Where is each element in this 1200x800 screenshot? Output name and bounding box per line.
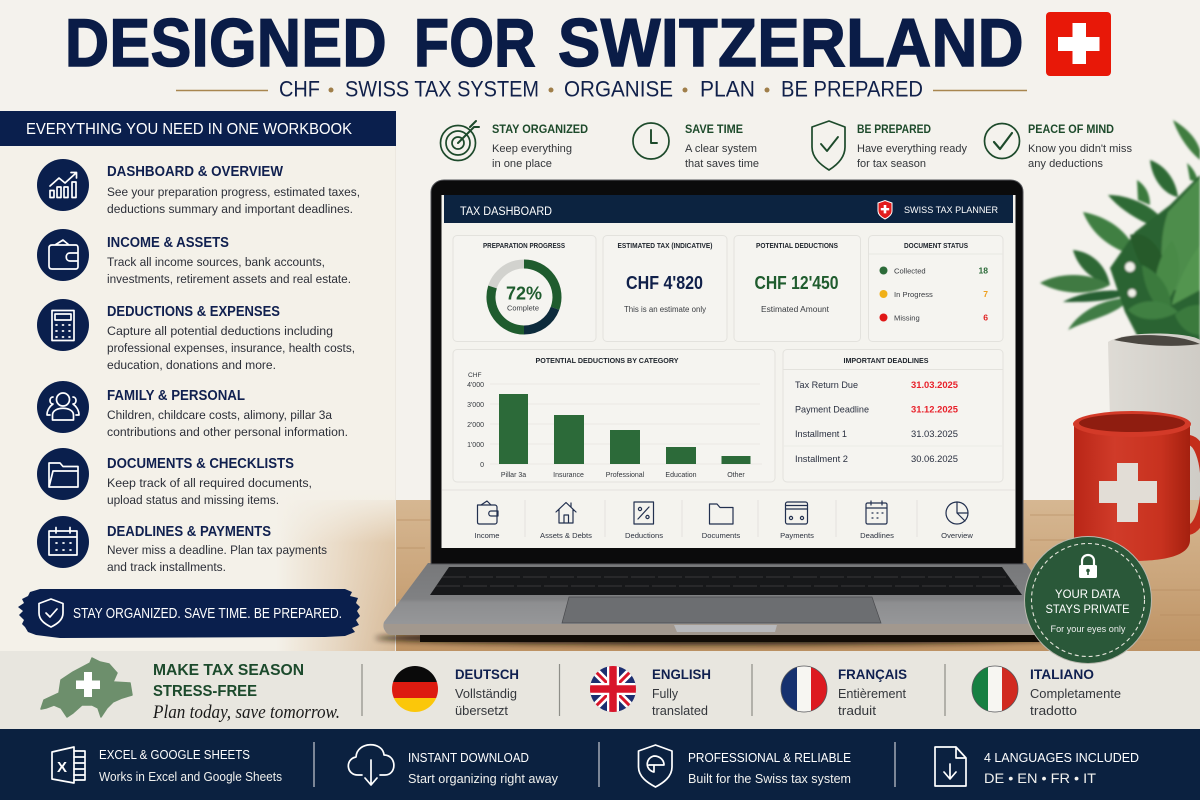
- dashboard navigation: Overview: [941, 531, 973, 540]
- footer features: [0, 729, 1200, 800]
- card: estimated tax: This is an estimate only: [624, 305, 706, 314]
- feature: professional and reliable: [638, 745, 851, 787]
- subtitle row: [176, 76, 1027, 102]
- card: important deadlines: Payment Deadline: [795, 404, 869, 414]
- language: English: ENGLISH: [652, 666, 711, 682]
- card: document status: Missing: [894, 314, 920, 322]
- dashboard navigation: Payments: [780, 531, 814, 540]
- feature: professional and reliable: Built for the Swiss tax system: [688, 771, 851, 786]
- language: Italian: ITALIANO: [1030, 666, 1094, 682]
- benefit: save time: that saves time: [685, 158, 759, 170]
- banner: stay organized: STAY ORGANIZED. SAVE TIME. BE PREPARED.: [73, 606, 342, 622]
- feature: four languages: [935, 747, 1139, 786]
- subtitle row: CHF: [279, 76, 320, 102]
- left panel background: [0, 146, 396, 651]
- benefit: stay organized: in one place: [492, 158, 552, 170]
- item: dashboard and overview: deductions summary and important deadlines.: [107, 202, 353, 216]
- bar chart: potential deductions by category: Education: [665, 472, 697, 479]
- subtitle row: PLAN: [700, 76, 755, 102]
- card: document status: [868, 236, 1003, 342]
- benefit: stay organized: [440, 121, 588, 170]
- card: estimated tax: CHF 4'820: [626, 273, 703, 293]
- language: Italian: Completamente: [1030, 686, 1121, 701]
- bar chart: potential deductions by category: Pillar 3a: [501, 472, 526, 479]
- benefit: save time: [633, 123, 759, 170]
- bar chart: potential deductions by category: 2'000: [467, 422, 484, 429]
- card: important deadlines: 31.03.2025: [911, 429, 958, 439]
- card: estimated tax: ESTIMATED TAX (INDICATIVE): [618, 241, 713, 250]
- card: potential deductions: CHF 12'450: [754, 273, 838, 293]
- item: documents and checklists: upload status and missing items.: [107, 493, 279, 507]
- privacy badge: STAYS PRIVATE: [1046, 602, 1130, 616]
- benefit: stay organized: STAY ORGANIZED: [492, 124, 588, 136]
- item: income and assets: INCOME & ASSETS: [107, 235, 229, 251]
- screen: [442, 195, 1016, 548]
- card: important deadlines: Installment 2: [795, 454, 848, 464]
- language: French: traduit: [838, 703, 876, 718]
- item: family and personal: FAMILY & PERSONAL: [107, 388, 245, 404]
- card: important deadlines: [783, 350, 1003, 482]
- card: potential deductions: Estimated Amount: [761, 305, 830, 314]
- panel heading: EVERYTHING YOU NEED IN ONE WORKBOOK: [26, 121, 353, 138]
- card: important deadlines: Tax Return Due: [795, 380, 858, 390]
- feature: four languages: 4 LANGUAGES INCLUDED: [984, 751, 1139, 765]
- item: family and personal: contributions and other personal information.: [107, 425, 348, 439]
- item: dashboard and overview: See your preparation progress, estimated taxes,: [107, 185, 360, 199]
- feature: Excel and Google Sheets: EXCEL & GOOGLE SHEETS: [99, 748, 250, 762]
- bar chart: potential deductions by category: 4'000: [467, 382, 484, 389]
- card: document status: In Progress: [894, 290, 933, 299]
- feature: instant download: Start organizing right away: [408, 771, 559, 786]
- card: document status: DOCUMENT STATUS: [904, 241, 968, 250]
- card: important deadlines: 30.06.2025: [911, 454, 958, 464]
- bar chart: potential deductions by category: POTENTIAL DEDUCTIONS BY CATEGORY: [536, 356, 679, 365]
- card: preparation progress: Complete: [507, 304, 539, 312]
- icon: Switzerland map: [41, 658, 132, 717]
- benefit: be prepared: BE PREPARED: [857, 124, 931, 136]
- item: deductions and expenses: Capture all potential deductions including: [107, 324, 333, 338]
- item: deductions and expenses: [37, 299, 355, 372]
- feature: instant download: [348, 745, 559, 786]
- benefit: peace of mind: Know you didn't miss: [1028, 143, 1133, 155]
- card: document status: Collected: [894, 266, 926, 276]
- language: French: FRANÇAIS: [838, 666, 907, 682]
- item: family and personal: [37, 381, 348, 439]
- bar chart: potential deductions by category: 3'000: [467, 402, 484, 409]
- title: [65, 5, 1024, 81]
- language: German: [392, 666, 519, 718]
- subtitle row: SWISS TAX SYSTEM: [345, 76, 539, 102]
- card: preparation progress: [453, 236, 596, 342]
- plant pot: [1108, 334, 1200, 500]
- privacy badge: For your eyes only: [1050, 624, 1126, 635]
- item: deadlines and payments: and track installments.: [107, 560, 226, 574]
- item: documents and checklists: DOCUMENTS & CHECKLISTS: [107, 456, 294, 472]
- laptop lid: [431, 180, 1023, 564]
- feature: Excel and Google Sheets: Works in Excel and Google Sheets: [99, 769, 282, 784]
- dashboard header: SWISS TAX PLANNER: [904, 205, 998, 216]
- language: French: [781, 666, 907, 718]
- slogan: Plan today, save tomorrow.: [152, 703, 340, 723]
- item: deadlines and payments: Never miss a deadline. Plan tax payments: [107, 543, 327, 557]
- dashboard navigation: Deadlines: [860, 531, 894, 540]
- privacy badge: [1024, 536, 1152, 664]
- card: document status: 7: [983, 289, 988, 299]
- title: DESIGNED: [65, 5, 387, 81]
- card: important deadlines: Installment 1: [795, 429, 847, 439]
- bar chart: potential deductions by category: 1'000: [467, 442, 484, 449]
- dashboard navigation: Documents: [702, 531, 740, 540]
- dashboard navigation: [442, 490, 1015, 540]
- red mug with Swiss cross: [1073, 411, 1200, 561]
- feature: four languages: DE • EN • FR • IT: [984, 770, 1096, 786]
- language: English: Fully: [652, 686, 679, 701]
- item: income and assets: [37, 229, 351, 286]
- item: income and assets: investments, retirement assets and real estate.: [107, 272, 351, 286]
- language: French: Entièrement: [838, 686, 906, 701]
- left panel: everything you need: [0, 111, 396, 651]
- dashboard navigation: Deductions: [625, 531, 663, 540]
- icon: Swiss flag: [1046, 12, 1111, 76]
- card: important deadlines: 31.12.2025: [911, 404, 958, 414]
- item: deadlines and payments: [37, 516, 327, 574]
- item: dashboard and overview: DASHBOARD & OVERVIEW: [107, 164, 283, 180]
- subtitle row: ORGANISE: [564, 76, 673, 102]
- card: document status: 6: [983, 312, 988, 322]
- card: preparation progress: 72%: [506, 284, 542, 304]
- benefit: peace of mind: [984, 124, 1133, 170]
- card: estimated tax: [603, 236, 727, 342]
- feature: Excel and Google Sheets: [52, 747, 282, 784]
- card: potential deductions: POTENTIAL DEDUCTIONS: [756, 241, 838, 250]
- language: English: [590, 666, 711, 718]
- feature: instant download: INSTANT DOWNLOAD: [408, 751, 529, 765]
- bar chart: potential deductions by category: Other: [727, 472, 745, 479]
- feature: professional and reliable: PROFESSIONAL & RELIABLE: [688, 751, 851, 765]
- bar chart: potential deductions by category: Insurance: [553, 472, 584, 479]
- slogan: MAKE TAX SEASON: [153, 662, 304, 679]
- title: FOR: [414, 5, 536, 81]
- slogan: STRESS-FREE: [153, 683, 257, 700]
- item: deadlines and payments: DEADLINES & PAYMENTS: [107, 524, 271, 540]
- card: preparation progress: PREPARATION PROGRESS: [483, 241, 565, 250]
- dashboard header: TAX DASHBOARD: [460, 206, 552, 218]
- slogan: [152, 662, 340, 723]
- card: potential deductions: [734, 236, 860, 342]
- bar chart: potential deductions by category: Professional: [606, 472, 645, 479]
- item: deductions and expenses: professional expenses, insurance, health costs,: [107, 341, 355, 355]
- benefit: be prepared: Have everything ready: [857, 143, 967, 155]
- card: important deadlines: IMPORTANT DEADLINES: [844, 356, 929, 365]
- item: family and personal: Children, childcare costs, alimony, pillar 3a: [107, 408, 332, 422]
- item: documents and checklists: Keep track of all required documents,: [107, 476, 312, 490]
- donut chart 72%: [491, 264, 557, 330]
- subtitle row: BE PREPARED: [781, 76, 923, 102]
- benefit: stay organized: Keep everything: [492, 143, 572, 155]
- item: deductions and expenses: DEDUCTIONS & EXPENSES: [107, 304, 280, 320]
- title: SWITZERLAND: [558, 5, 1024, 81]
- benefit: peace of mind: PEACE OF MIND: [1028, 124, 1114, 136]
- banner: stay organized: [18, 589, 360, 638]
- language: German: Vollständig: [455, 686, 517, 701]
- item: documents and checklists: [37, 448, 312, 507]
- privacy badge: YOUR DATA: [1055, 587, 1120, 601]
- plant: [1040, 120, 1200, 345]
- language: German: DEUTSCH: [455, 666, 519, 682]
- laptop base: [383, 563, 1060, 635]
- icon: map cross: [76, 672, 100, 697]
- dashboard header: [444, 195, 1013, 223]
- benefit: be prepared: [812, 121, 967, 170]
- language: Italian: [972, 666, 1121, 718]
- dashboard navigation: Income: [475, 531, 499, 540]
- strip: languages: [40, 657, 1120, 722]
- benefit: be prepared: for tax season: [857, 158, 926, 170]
- bar chart: potential deductions by category: 0: [480, 462, 484, 469]
- feature: Excel and Google Sheets: X: [57, 759, 67, 776]
- benefit: peace of mind: any deductions: [1028, 158, 1104, 170]
- item: deductions and expenses: education, donations and more.: [107, 358, 276, 372]
- benefit: save time: SAVE TIME: [685, 124, 743, 136]
- icon: padlock: [1079, 555, 1097, 578]
- language: English: translated: [652, 703, 708, 718]
- panel heading: [0, 111, 396, 146]
- wooden table: [0, 500, 1200, 652]
- item: dashboard and overview: [37, 159, 360, 216]
- card: document status: 18: [978, 266, 988, 276]
- item: income and assets: Track all income sources, bank accounts,: [107, 255, 325, 269]
- language: German: übersetzt: [455, 703, 508, 718]
- dashboard navigation: Assets & Debts: [540, 531, 592, 540]
- language strip background: [0, 651, 1200, 729]
- card: important deadlines: 31.03.2025: [911, 380, 958, 390]
- language: Italian: tradotto: [1030, 703, 1077, 718]
- bar chart: potential deductions by category: [453, 350, 775, 482]
- benefit: save time: A clear system: [685, 143, 757, 155]
- bar chart: potential deductions by category: CHF: [468, 372, 482, 379]
- laptop: [375, 180, 1065, 645]
